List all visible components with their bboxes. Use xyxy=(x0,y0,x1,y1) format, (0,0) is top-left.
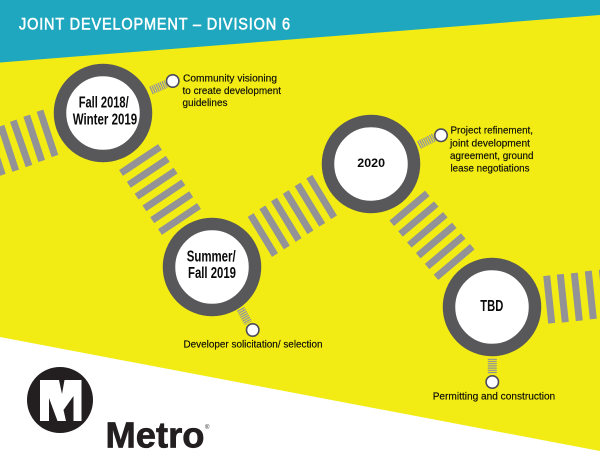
stage 4 label: TBD xyxy=(480,298,503,315)
stage 3 ring xyxy=(328,121,414,207)
track: right exit ties xyxy=(547,270,600,323)
stage 1 ring xyxy=(60,70,146,156)
stage 1 description: guidelines xyxy=(182,97,228,109)
stage 1 description: Community visioning xyxy=(183,72,277,84)
footer area: white xyxy=(0,337,600,464)
logo badge: M in circle xyxy=(27,367,93,433)
stage 1 description: to create development xyxy=(182,85,281,97)
stage 2: Summer / Fall 2019 xyxy=(169,224,323,350)
logo wordmark: Metro xyxy=(106,414,204,456)
stage 1 dot xyxy=(166,75,179,87)
stage 3 connector xyxy=(419,137,435,145)
track: ties from stage 3 to stage 4 xyxy=(392,193,472,277)
Metro logo xyxy=(27,367,210,456)
stage 3 label: 2020 xyxy=(357,156,385,170)
stage 3 dot xyxy=(435,129,447,142)
track: left entry ties xyxy=(0,111,55,175)
registered mark: ® xyxy=(205,424,210,431)
stage 2 label: Fall 2019 xyxy=(188,265,236,282)
track: ties from stage 1 to stage 2 xyxy=(121,147,199,232)
stage 2 dot xyxy=(246,324,259,336)
stage 3 description: joint development xyxy=(449,138,530,150)
stage 1 label: Fall 2018/ xyxy=(79,94,129,112)
stage 4 description: Permitting and construction xyxy=(433,391,555,403)
stage 2 ring xyxy=(169,224,255,310)
stage 4 dot xyxy=(486,376,498,388)
stage 2 label: Summer/ xyxy=(187,248,236,266)
header band: teal xyxy=(0,0,600,62)
stage 3 description: Project refinement, xyxy=(450,124,533,136)
stage 3 description: agreement, ground xyxy=(450,150,534,162)
track: ties from stage 2 to stage 3 xyxy=(251,177,334,255)
stage 3 description: lease negotiations xyxy=(450,162,530,174)
stage 4: TBD xyxy=(433,264,555,403)
stage 2 description: Developer solicitation/ selection xyxy=(184,338,323,350)
stage 4 connector xyxy=(488,359,497,374)
stage 1: Fall 2018 / Winter 2019 xyxy=(60,70,281,156)
stage 3: 2020 xyxy=(328,121,534,207)
stage 2 connector xyxy=(241,309,248,323)
title: JOINT DEVELOPMENT – DIVISION 6 xyxy=(19,16,290,34)
stage 4 ring xyxy=(449,264,535,350)
stage 1 label: Winter 2019 xyxy=(73,112,137,128)
stage 1 connector xyxy=(151,84,166,90)
